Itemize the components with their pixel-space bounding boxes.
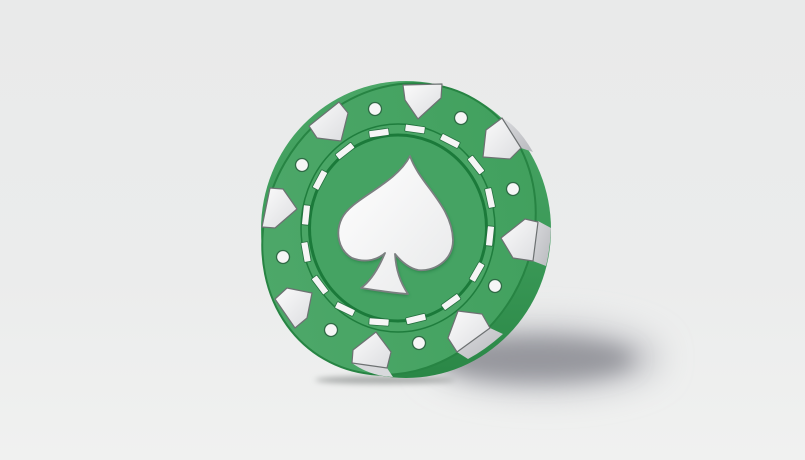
cast shadow (315, 324, 660, 392)
hexagon inlays (262, 84, 538, 368)
rivet dots (276, 102, 520, 350)
outer ring (301, 124, 495, 332)
dashed white ring (301, 124, 496, 326)
chip face (210, 33, 588, 425)
edge silver segments (352, 118, 551, 377)
inner disc (310, 135, 486, 321)
spade (338, 156, 454, 296)
chip edge (261, 81, 551, 378)
